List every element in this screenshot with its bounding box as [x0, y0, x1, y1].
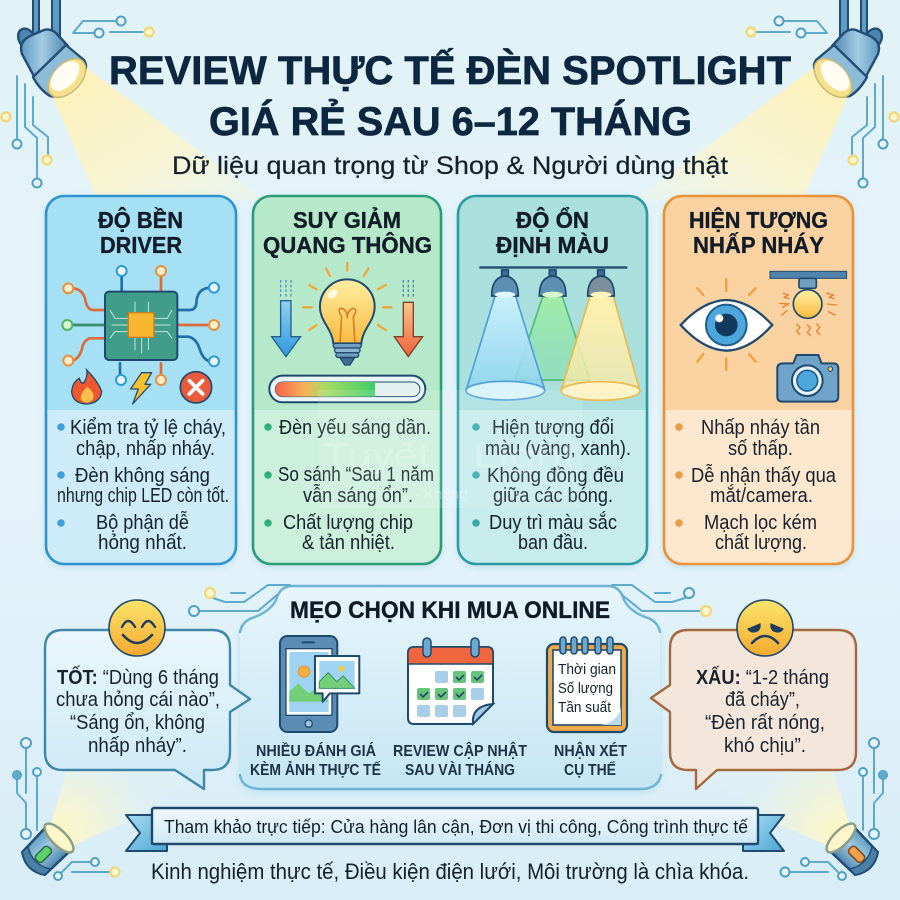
flashlight beam left — [50, 770, 200, 845]
heading: NHẤP NHÁY — [693, 231, 824, 258]
icon: camera — [777, 355, 838, 402]
icon: three track lights — [466, 266, 640, 400]
icon: spotlight left — [15, 0, 93, 104]
bullet list: Bộ phận dễ — [96, 511, 189, 534]
label: nhận xét cụ thể: CỤ THỂ — [564, 761, 616, 779]
icon: notepad: Số lượng — [558, 681, 613, 697]
icon: circuit chip — [62, 266, 219, 404]
bullet list: chập, nhấp nháy. — [76, 438, 215, 460]
heading — [689, 206, 828, 258]
title — [109, 47, 791, 144]
panel: Suy giảm quang thông — [253, 196, 441, 564]
circuit decoration panel right — [612, 585, 711, 616]
icon: happy face — [109, 600, 165, 656]
bullet list — [472, 417, 631, 554]
bullet list: Không đồng đều — [487, 465, 624, 487]
heading: DRIVER — [100, 232, 182, 258]
spotlight beam right — [635, 67, 847, 200]
bullet list: Mạch lọc kém — [704, 512, 817, 534]
heading — [98, 206, 183, 258]
heading: HIỆN TƯỢNG — [689, 206, 828, 233]
bullet list: màu (vàng, xanh). — [485, 438, 631, 460]
bullet list: vẫn sáng ổn”. — [303, 484, 413, 507]
callout: bad review — [651, 600, 856, 789]
bullet list — [675, 417, 837, 554]
label: ảnh thực tế — [250, 743, 381, 779]
icon: phone with photo — [280, 636, 359, 732]
panel: Mẹo chọn khi mua online — [240, 586, 661, 789]
icon: arrow down blue — [272, 280, 301, 357]
circuit decoration top left — [2, 16, 154, 188]
quote text: nhấp nháy”. — [88, 735, 187, 757]
icon: flashlight left — [16, 819, 78, 881]
circuit decoration panel left — [189, 585, 290, 616]
icon: flashlight right — [822, 819, 884, 881]
label: nhận xét cụ thể: NHẬN XÉT — [554, 742, 627, 760]
heading: SUY GIẢM — [293, 205, 401, 233]
quote text: đã cháy”, — [725, 689, 800, 711]
icon: notepad — [547, 637, 627, 732]
quote text: “Đèn rất nóng, — [705, 712, 825, 734]
title: REVIEW THỰC TẾ ĐÈN SPOTLIGHT — [109, 47, 791, 93]
spotlight beam left — [53, 67, 265, 200]
heading: ĐỘ ỔN — [516, 206, 589, 233]
panel: Độ bền driver — [46, 196, 236, 564]
flashlight beam right — [700, 770, 850, 845]
quote text: “Sáng ổn, không — [70, 712, 205, 734]
bullet list: mắt/camera. — [710, 484, 813, 507]
watermark: Light — [473, 437, 576, 475]
bullet list: chất lượng. — [715, 532, 807, 554]
icon: calendar — [408, 638, 493, 724]
watermark: - Không — [415, 486, 468, 503]
callout: good review — [45, 600, 250, 789]
bullet list: Hiện tượng đổi — [492, 417, 614, 439]
label: review cập nhật — [393, 742, 527, 779]
bullet list: Nhấp nháy tần — [701, 417, 820, 439]
banner: tham khảo trực tiếp: Tham khảo trực tiếp: Cửa hàng lân cận, Đơn vị thi công, Công trình thực tế — [164, 816, 749, 837]
subtitle: Dữ liệu quan trọng từ Shop & Người dùng thật — [172, 152, 728, 180]
banner: tham khảo trực tiếp — [126, 808, 784, 851]
icon: notepad: Thời gian — [558, 662, 616, 678]
icon: spotlight right — [807, 0, 885, 104]
quote text: XẤU: “1-2 tháng — [696, 666, 829, 689]
bullet list — [264, 417, 434, 554]
label: nhận xét cụ thể — [554, 742, 627, 779]
icon: sad face — [737, 600, 793, 656]
icon: light bulb — [303, 263, 391, 365]
label: ảnh thực tế: NHIỀU ĐÁNH GIÁ — [256, 743, 376, 760]
circuit decoration top right — [746, 16, 898, 188]
heading: MẸO CHỌN KHI MUA ONLINE — [290, 597, 610, 624]
bullet list: Kiểm tra tỷ lệ cháy, — [70, 417, 226, 439]
watermark: Tuyết — [323, 437, 431, 475]
bullet list: Đèn không sáng — [75, 465, 210, 487]
heading: QUANG THÔNG — [263, 231, 432, 258]
quote text: khó chịu”. — [724, 735, 806, 757]
icon: arrow down orange — [394, 280, 423, 357]
heading — [496, 206, 609, 258]
label: review cập nhật: REVIEW CẬP NHẬT — [393, 742, 527, 760]
bullet list: & tản nhiệt. — [302, 532, 395, 554]
icon: flickering bulb — [770, 271, 847, 336]
bullet list: So sánh “Sau 1 năm — [278, 464, 434, 486]
closing text: Kinh nghiệm thực tế, Điều kiện điện lưới, Môi trường là chìa khóa. — [151, 859, 749, 884]
bullet list: nhưng chip LED còn tốt. — [57, 485, 229, 507]
title: GIÁ RẺ SAU 6–12 THÁNG — [209, 98, 692, 144]
circuit decoration bottom right — [780, 738, 888, 880]
quote text — [696, 666, 829, 757]
quote text — [56, 665, 220, 757]
label: review cập nhật: SAU VÀI THÁNG — [405, 762, 515, 779]
icon: notepad: Tần suất — [558, 700, 611, 716]
bullet list: ban đầu. — [518, 532, 588, 554]
heading: ĐỊNH MÀU — [496, 231, 609, 258]
circuit decoration bottom left — [12, 738, 120, 880]
quote text: TỐT: “Dùng 6 tháng — [57, 665, 219, 689]
bullet list: Đèn yếu sáng dần. — [279, 417, 431, 439]
bullet list: giữa các bóng. — [493, 485, 613, 507]
progress bar — [269, 376, 425, 402]
heading — [263, 205, 432, 258]
panel: Độ ổn định màu — [458, 196, 647, 564]
bullet list: hỏng nhất. — [98, 532, 187, 554]
bullet list: Duy trì màu sắc — [489, 511, 617, 534]
bullet list: số thấp. — [728, 438, 793, 460]
quote text: chưa hỏng cái nào”, — [56, 689, 220, 711]
bullet list — [57, 417, 229, 554]
bullet list: Dễ nhận thấy qua — [691, 464, 837, 487]
panel: Hiện tượng nhấp nháy — [664, 196, 853, 564]
heading: ĐỘ BỀN — [98, 206, 183, 233]
icon: eye — [681, 279, 772, 370]
label: ảnh thực tế: KÈM ẢNH THỰC TẾ — [250, 762, 381, 779]
bullet list: Chất lượng chip — [283, 512, 413, 534]
watermark — [318, 390, 582, 508]
